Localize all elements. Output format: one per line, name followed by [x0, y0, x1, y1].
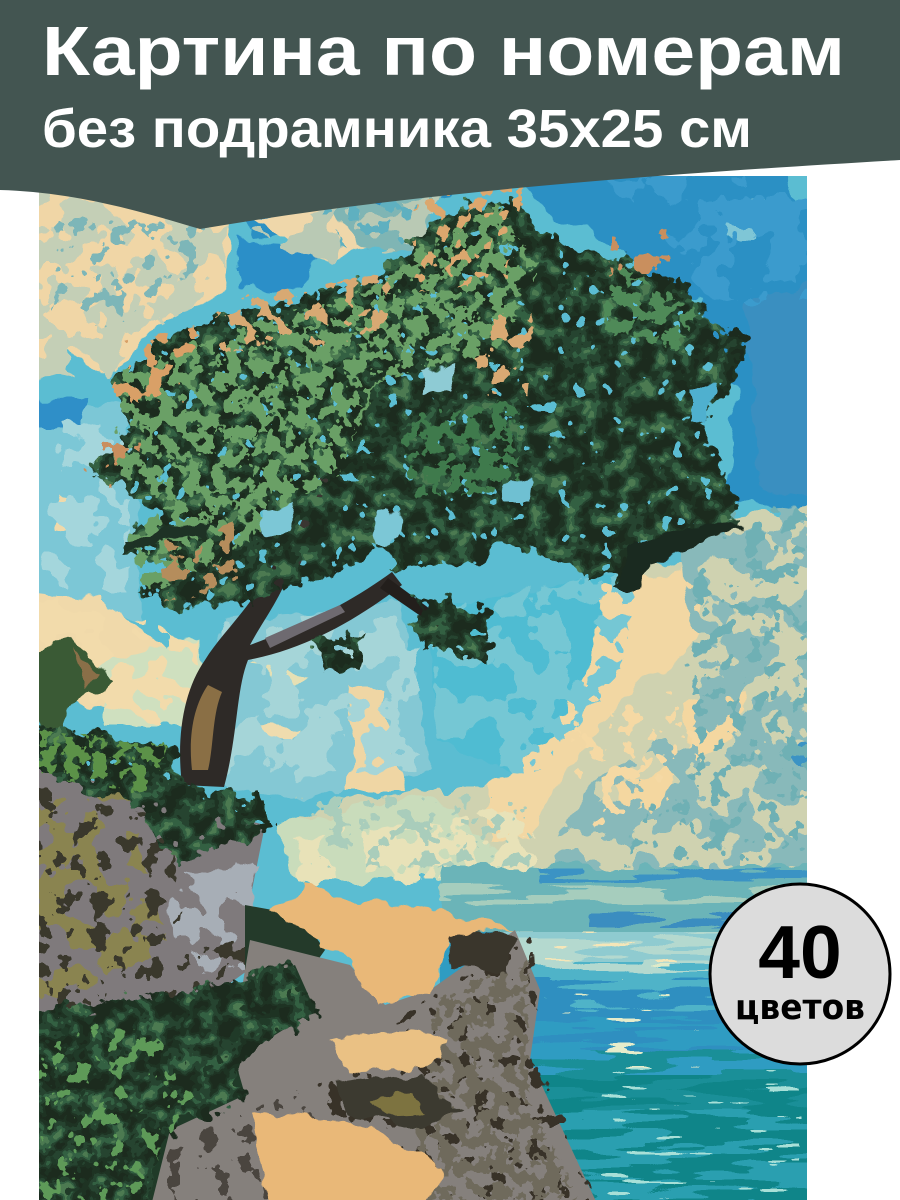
horizon bands: [440, 868, 840, 928]
tree trunk and branches: [180, 478, 438, 787]
horizon: [440, 866, 840, 938]
sun reflections: [545, 934, 800, 1200]
ground olive patches: [420, 960, 580, 1200]
subtitle: без подрамника 35х25 см: [42, 99, 752, 159]
lower greenery texture: [30, 960, 315, 1200]
left bush: [39, 636, 113, 729]
badge label: цветов: [735, 988, 865, 1028]
header banner: [0, 0, 900, 229]
sky: [39, 176, 807, 1005]
sunlit sand path: [250, 880, 515, 1200]
cliff ground: [152, 930, 596, 1200]
lower greenery highlights: [30, 1030, 190, 1200]
tree foliage: [92, 200, 745, 672]
foliage green highlights: [120, 205, 700, 590]
clouds: [20, 190, 830, 880]
dark lower branches: [120, 522, 745, 590]
banner shape: [0, 0, 900, 229]
foliage orange tips: [90, 185, 670, 605]
cliff top green base: [40, 730, 170, 790]
ground dark hollows: [335, 932, 520, 1130]
badge circle: [710, 884, 890, 1064]
sea base: [440, 932, 840, 1200]
badge number: 40: [758, 910, 842, 994]
sea waves: [516, 931, 807, 1200]
lower left greenery: [30, 965, 315, 1200]
cloud dark shading: [50, 195, 830, 870]
ground dark rock: [170, 940, 600, 1200]
cliff top bushes: [30, 725, 265, 860]
title: Картина по номерам: [42, 12, 845, 90]
sky gaps in foliage: [262, 364, 718, 542]
left cliff rock: [39, 769, 264, 1018]
cliff dark patches: [39, 787, 245, 1015]
cliff olive patches: [39, 792, 260, 999]
greenery behind the ledge: [245, 905, 325, 970]
painting: tree on a cliff above the sea: [39, 176, 807, 1200]
cloud shading: [20, 176, 830, 880]
